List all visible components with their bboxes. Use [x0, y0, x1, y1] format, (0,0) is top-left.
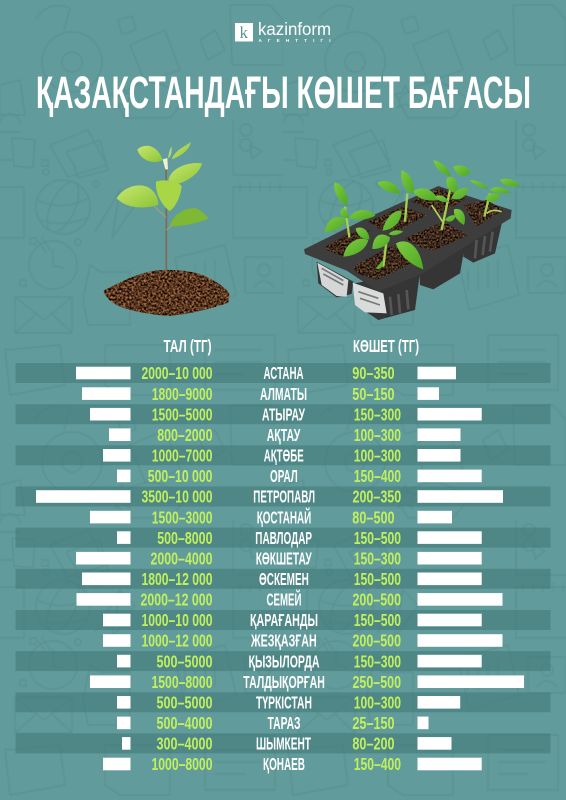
- row: Павлодар: [16, 528, 550, 548]
- row: Семей: 2000–12 000: [140, 590, 213, 610]
- row: Өскемен: ӨСКЕМЕН: [259, 569, 309, 589]
- row: Орал: [117, 466, 482, 486]
- row: Қарағанды: [16, 610, 550, 630]
- rim: [304, 186, 512, 292]
- pots: [317, 224, 502, 320]
- row: Тараз: ТАРАЗ: [268, 713, 301, 733]
- row: Ақтөбе: 1000–7000: [152, 445, 213, 465]
- row: Түркістан: 500–5000: [156, 692, 213, 712]
- row: Түркістан: ТҮРКІСТАН: [256, 692, 312, 712]
- row: Түркістан: 100–300: [354, 692, 401, 712]
- row: Талдықорған: 1500–8000: [152, 672, 213, 692]
- row: Қарағанды: ҚАРАҒАНДЫ: [250, 610, 318, 630]
- column heading: КӨШЕТ (ТГ): КӨШЕТ (ТГ): [353, 336, 419, 356]
- logo: kazinform: [235, 19, 331, 43]
- row: Қонаев: 150–400: [354, 754, 401, 774]
- row: Семей: [76, 589, 502, 610]
- column heading: ТАЛ (ТГ): ТАЛ (ТГ): [164, 336, 212, 356]
- row: Көкшетау: 2000–4000: [150, 548, 213, 568]
- row: Тараз: 25–150: [352, 713, 395, 733]
- row: Орал: 500–10 000: [148, 466, 213, 486]
- row: Өскемен: 150–500: [354, 569, 401, 589]
- row: Астана: 90–350: [352, 363, 395, 383]
- row: Қостанай: ҚОСТАНАЙ: [257, 506, 311, 527]
- row: Тараз: [117, 713, 428, 733]
- row: Көкшетау: [76, 548, 482, 568]
- row: Петропавл: ПЕТРОПАВЛ: [253, 487, 315, 507]
- row: Қонаев: ҚОНАЕВ: [263, 754, 305, 774]
- row: Атырау: АТЫРАУ: [262, 404, 306, 424]
- row: Атырау: 1500–5000: [152, 404, 213, 424]
- row: Алматы: 50–150: [352, 384, 395, 404]
- row: Талдықорған: 250–500: [352, 672, 401, 692]
- row: Жезқазған: [103, 631, 502, 651]
- stems: [345, 190, 490, 267]
- row: Қызылорда: [16, 651, 550, 671]
- row: Қарағанды: 1000–10 000: [142, 610, 213, 630]
- row: Өскемен: 1800–12 000: [142, 569, 213, 589]
- row: Ақтөбе: АҚТӨБЕ: [264, 445, 304, 465]
- row: Ақтау: [109, 425, 460, 445]
- soil cells: [325, 188, 503, 280]
- row: Астана: 2000–10 000: [142, 363, 213, 383]
- row: Алматы: АЛМАТЫ: [260, 384, 307, 404]
- row: Қостанай: 1500–3000: [152, 507, 213, 527]
- row: Түркістан: [16, 692, 550, 712]
- row: Астана: [16, 363, 550, 383]
- row: Павлодар: 500–8000: [157, 528, 213, 548]
- row: Астана: АСТАНА: [264, 363, 304, 383]
- row: Қостанай: [90, 506, 452, 527]
- row: Қарағанды: 150–500: [354, 610, 401, 630]
- row: Ақтау: 100–300: [354, 425, 401, 445]
- row: Қонаев: [103, 754, 482, 774]
- row: Ақтау: 800–2000: [157, 425, 213, 445]
- row: Алматы: [82, 384, 439, 404]
- row: Семей: 200–500: [352, 590, 401, 610]
- row: Өскемен: [16, 569, 550, 589]
- row: Тараз: 500–4000: [156, 713, 213, 733]
- image: seedling tray: [304, 160, 520, 320]
- row: Қонаев: 1000–8000: [152, 754, 213, 774]
- row: Орал: 150–400: [354, 466, 401, 486]
- row: Талдықорған: ТАЛДЫҚОРҒАН: [243, 672, 325, 692]
- row: Павлодар: 150–500: [354, 528, 401, 548]
- image: sapling in soil: [103, 142, 229, 316]
- row: Петропавл: 3500–10 000: [142, 487, 213, 507]
- row: Семей: СЕМЕЙ: [266, 589, 302, 610]
- row: Атырау: [16, 404, 550, 424]
- row: Ақтау: АҚТАУ: [267, 425, 301, 445]
- row: Шымкент: 300–4000: [156, 734, 213, 754]
- row: Атырау: 150–300: [354, 404, 401, 424]
- row: Ақтөбе: 100–300: [354, 445, 401, 465]
- logo: kazinform: АГЕНТТІГІ: [258, 38, 330, 43]
- row: Талдықорған: [90, 672, 524, 692]
- row: Қызылорда: 150–300: [354, 651, 401, 671]
- row: Павлодар: ПАВЛОДАР: [255, 528, 312, 548]
- row: Жезқазған: 1000–12 000: [142, 631, 213, 651]
- logo: kazinform: k: [240, 23, 248, 42]
- leaves: [325, 160, 520, 269]
- row: Жезқазған: ЖЕЗҚАЗҒАН: [250, 631, 317, 651]
- row: Көкшетау: КӨКШЕТАУ: [256, 548, 312, 568]
- row: Шымкент: 80–200: [352, 734, 395, 754]
- row: Петропавл: [16, 486, 550, 507]
- row: Қостанай: 80–500: [352, 507, 395, 527]
- row: Орал: ОРАЛ: [270, 466, 298, 486]
- row: Шымкент: [16, 733, 550, 754]
- logo: kazinform: kazinform: [258, 19, 331, 39]
- row: Көкшетау: 150–300: [354, 548, 401, 568]
- row: Шымкент: ШЫМКЕНТ: [256, 734, 311, 754]
- row: Алматы: 1800–9000: [152, 384, 213, 404]
- row: Жезқазған: 200–500: [352, 631, 401, 651]
- row: Петропавл: 200–350: [352, 487, 401, 507]
- labels: [317, 263, 348, 297]
- row: Ақтөбе: [16, 445, 550, 466]
- row: Қызылорда: ҚЫЗЫЛОРДА: [248, 651, 320, 671]
- row: Қызылорда: 500–5000: [156, 651, 213, 671]
